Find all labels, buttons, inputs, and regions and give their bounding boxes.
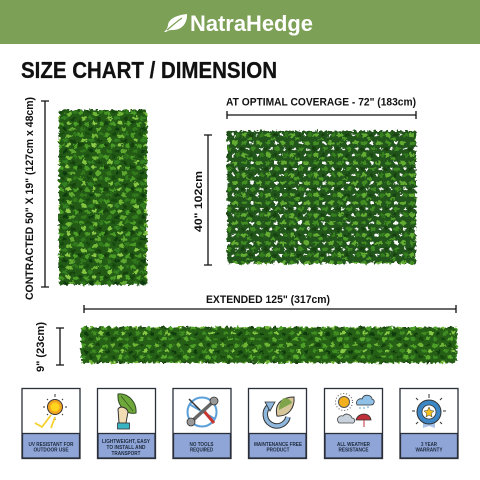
icon: snow cloud [357,395,374,408]
photo: optimal coverage hedge panel [227,131,416,264]
photo: extended hedge panel [81,327,457,363]
caption: UV RESISTANT FOR [28,442,74,448]
contracted dimension bar [41,101,49,287]
contracted dimension label: CONTRACTED 50" X 19" (127cm x 48cm) [24,97,36,300]
width label: 9" (23cm) [35,322,47,372]
caption: 3 YEAR [421,442,437,448]
optimal coverage bar [227,111,416,119]
icon: sun with check [35,394,67,428]
caption [28,442,74,454]
caption: OUTDOOR USE [34,448,69,454]
height bar [204,135,212,265]
caption: TO INSTALL AND [106,445,146,451]
icon: sun [336,394,352,410]
height label: 40" 102cm [193,171,205,232]
optimal coverage label: AT OPTIMAL COVERAGE - 72" (183cm) [226,96,416,108]
icon: hand holding leaf [118,394,136,429]
icon: umbrella [356,414,371,427]
icon: storm cloud [338,414,355,423]
caption: TRANSPORT [112,451,141,457]
caption [254,442,302,454]
panel: warranty [400,388,458,458]
photo: contracted hedge panel [59,110,147,285]
extended bar [84,305,456,313]
panel: UV resistant [22,388,80,458]
caption: RESISTANCE [338,448,369,454]
panel: maintenance free [248,388,306,458]
caption: ALL WEATHER [337,442,370,448]
icon: cycle with leaf [265,397,294,426]
caption: REQUIRED [190,448,213,454]
icon: logo leaf [164,14,187,32]
panel: no tools [173,388,231,458]
panel: lightweight [98,388,156,458]
caption [102,439,150,457]
caption: PRODUCT [266,448,290,454]
caption [416,442,443,454]
extended label: EXTENDED 125" (317cm) [206,294,330,306]
title: SIZE CHART / DIMENSION [21,57,277,83]
caption: MAINTENANCE FREE [254,442,302,448]
panel: all weather [324,388,382,458]
caption [190,442,214,454]
caption: LIGHTWEIGHT, EASY [102,439,150,445]
width bar [56,328,64,365]
icon: award badge [412,394,446,428]
icon: crossed tools [187,397,218,426]
caption [337,442,370,454]
header banner [0,0,480,44]
logo wordmark: NatraHedge [190,11,313,36]
caption: WARRANTY [416,448,443,454]
caption: NO TOOLS [190,442,214,448]
